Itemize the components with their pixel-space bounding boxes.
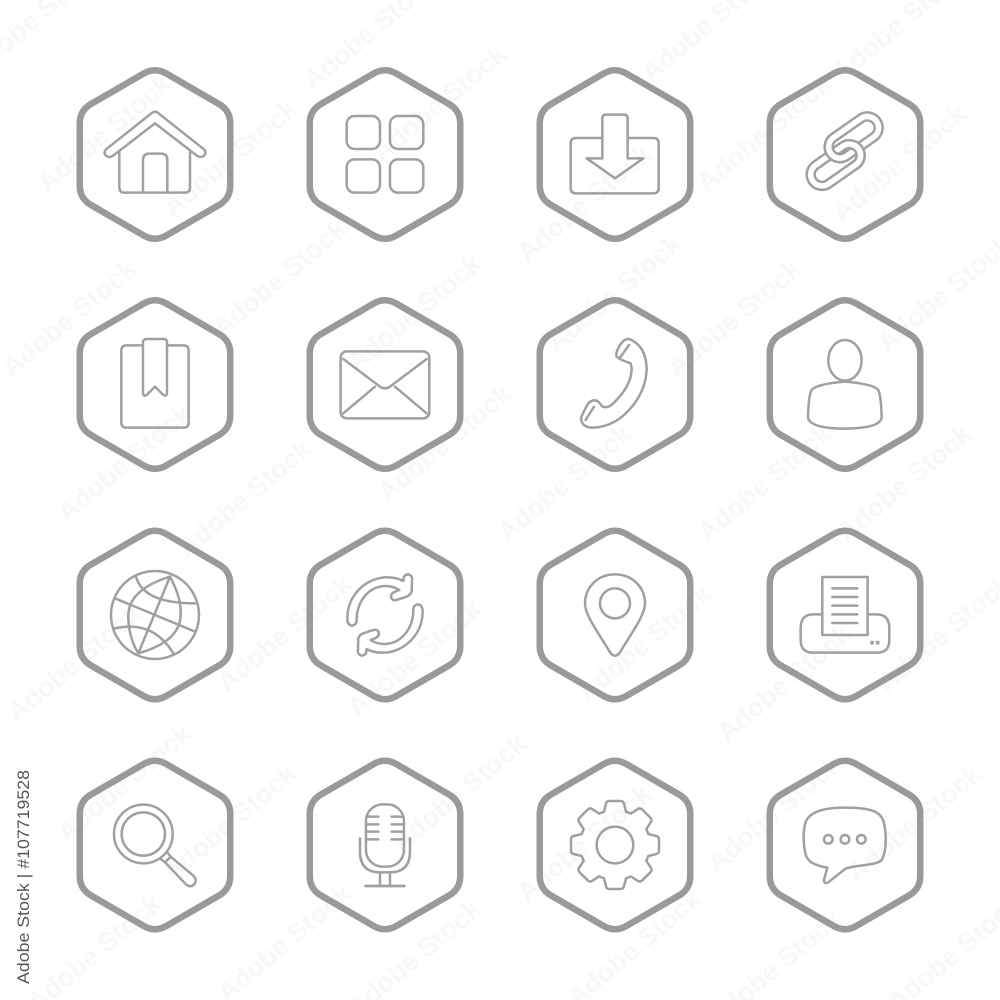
stock credit text: Adobe Stock | #107719528 <box>14 770 33 984</box>
watermark pattern: Adobe Stock <box>0 253 143 383</box>
watermark pattern: Adobe Stock <box>511 778 658 908</box>
watermark pattern: Adobe Stock <box>491 418 638 548</box>
panel: download <box>540 70 690 239</box>
watermark pattern: Adobe Stock <box>31 68 178 198</box>
icon: map pin <box>585 574 645 656</box>
panel: mail <box>310 300 460 469</box>
panel: bookmark <box>80 300 230 469</box>
icon: user <box>808 340 882 429</box>
watermark pattern: Adobe Stock <box>1 598 148 728</box>
watermark pattern: Adobe Stock <box>711 618 858 748</box>
panel: printer <box>770 531 920 699</box>
watermark pattern: Adobe Stock <box>341 248 488 378</box>
icon: magnifying glass <box>114 805 196 886</box>
panel: sync <box>310 531 460 699</box>
panel: user <box>770 300 920 469</box>
panel: settings <box>540 761 690 929</box>
icon: phone handset <box>581 339 647 428</box>
icon: printer <box>801 577 889 653</box>
watermark pattern: Adobe Stock <box>211 568 358 698</box>
watermark pattern: Adobe Stock <box>157 93 304 223</box>
watermark pattern: Adobe Stock <box>511 138 658 268</box>
icon: bookmark <box>121 339 189 428</box>
watermark pattern: Adobe Stock <box>661 253 808 383</box>
panel: home <box>80 70 230 239</box>
icon: speech bubble <box>804 808 886 883</box>
panel: globe <box>80 531 230 699</box>
panel: link <box>770 70 920 239</box>
icon: home <box>105 112 205 193</box>
icon: sync arrows <box>347 574 423 656</box>
watermark pattern: Adobe Stock <box>171 433 318 563</box>
icon: microphone <box>360 804 410 886</box>
panel: chat <box>770 761 920 929</box>
watermark pattern: Adobe Stock <box>156 758 303 888</box>
watermark pattern: Adobe Stock <box>701 748 848 878</box>
watermark pattern: Adobe Stock <box>841 758 988 888</box>
watermark pattern: Adobe Stock <box>341 593 488 723</box>
watermark pattern: Adobe Stock <box>51 718 198 848</box>
panel: apps grid <box>310 70 460 239</box>
watermark pattern: Adobe Stock <box>206 213 353 343</box>
icon: envelope <box>341 351 429 418</box>
watermark pattern: Adobe Stock <box>571 578 718 708</box>
watermark pattern: Adobe Stock <box>541 228 688 358</box>
icon: apps grid <box>347 116 423 193</box>
panel: phone <box>540 300 690 469</box>
watermark pattern: Adobe Stock <box>371 378 518 508</box>
watermark pattern: Adobe Stock <box>826 98 973 228</box>
watermark pattern: Adobe Stock <box>691 68 838 198</box>
icon: globe <box>111 571 199 659</box>
icon: chain link <box>805 111 884 192</box>
panel: microphone <box>310 761 460 929</box>
watermark pattern: Adobe Stock <box>691 418 838 548</box>
panel: location <box>540 531 690 699</box>
watermark pattern: Adobe Stock <box>386 728 533 858</box>
icon: gear <box>571 801 659 889</box>
watermark pattern: Adobe Stock <box>831 418 978 548</box>
icon: download <box>571 115 659 193</box>
watermark pattern: Adobe Stock <box>366 38 513 168</box>
panel: search <box>80 761 230 929</box>
watermark pattern: Adobe Stock <box>51 398 198 528</box>
